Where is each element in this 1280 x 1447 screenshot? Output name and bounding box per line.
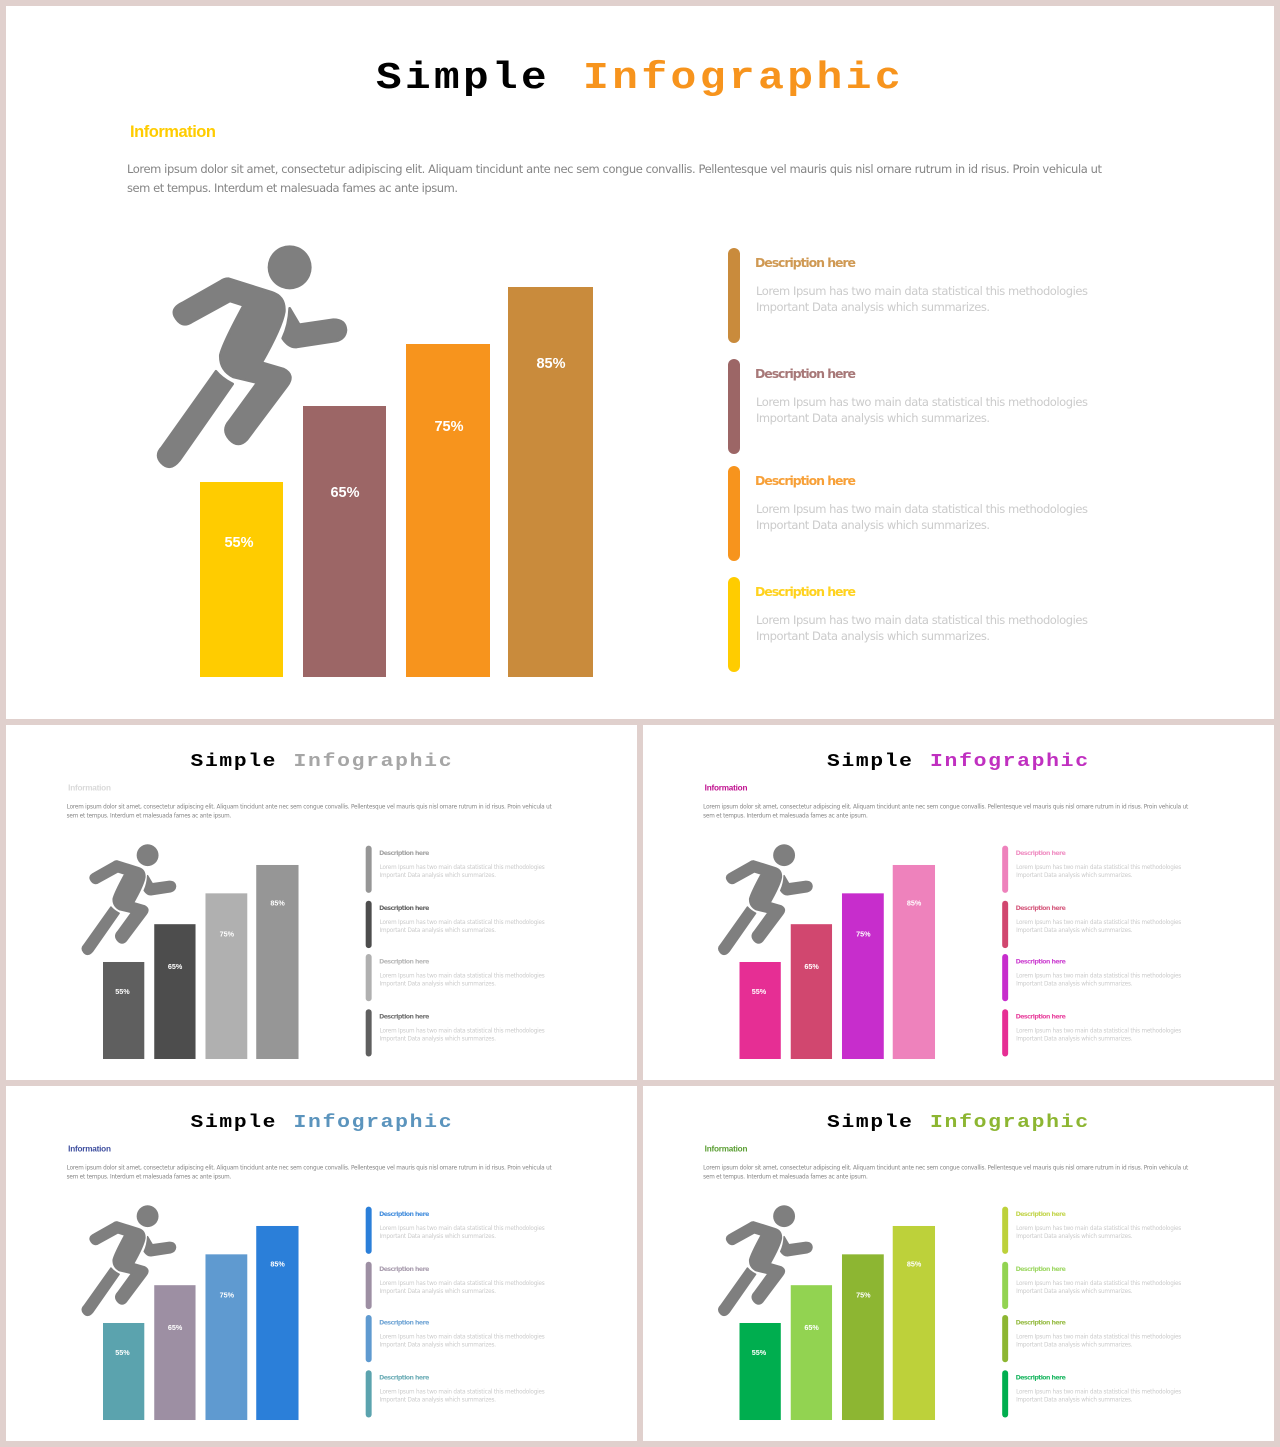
text block: intro: Lorem ipsum dolor sit amet, consectetur adipiscing elit. Aliquam tincidunt ante nec sem congue convallis. Pellentesque vel mauris quis nisl ornare rutrum in id risus. Proin vehicula ut [703,1165,1189,1171]
list: descriptions: Lorem Ipsum has two main data statistical this methodologies [756,502,1088,516]
title: Infographic [294,750,453,772]
list: descriptions: Important Data analysis which summarizes. [756,629,990,643]
list: descriptions: Description here [755,366,856,381]
list: descriptions: Lorem Ipsum has two main data statistical this methodologies [1016,1226,1181,1232]
text block: intro: Lorem ipsum dolor sit amet, consectetur adipiscing elit. Aliquam tincidunt ante nec sem congue convallis. Pellentesque vel mauris quis nisl ornare rutrum in id risus. Proin vehicula ut [67,1165,552,1171]
bar chart: 85% [907,1259,922,1268]
list: descriptions: Important Data analysis which summarizes. [756,518,990,532]
text block: intro [703,1165,1189,1181]
bar chart: 85% [270,898,285,907]
bar chart: 55% [115,1348,130,1357]
list: descriptions: Description here [379,1319,429,1326]
list: descriptions: Description here [379,905,429,912]
text block: intro [67,1165,552,1181]
bar chart [103,1226,299,1420]
title: Infographic [930,1111,1090,1133]
title [376,57,904,100]
list: descriptions: Description here [1016,1319,1066,1326]
title [191,750,453,772]
list: descriptions: Important Data analysis which summarizes. [1016,1234,1133,1240]
list: descriptions: Description here [1016,958,1066,965]
list: descriptions: Important Data analysis which summarizes. [1016,1342,1133,1348]
list: descriptions: Important Data analysis which summarizes. [1016,1037,1133,1043]
bar chart [740,1226,935,1420]
text block: intro: sem et tempus. Interdum et malesuada fames ac ante ipsum. [703,814,868,820]
panel: green slide [643,1086,1274,1441]
list: descriptions: Important Data analysis which summarizes. [756,411,990,425]
panel: pink slide [643,725,1274,1080]
list: descriptions: Important Data analysis which summarizes. [1016,981,1133,987]
bar chart [740,865,935,1059]
title: Infographic [583,57,904,100]
list: descriptions: Important Data analysis which summarizes. [380,873,496,879]
list: descriptions: Important Data analysis which summarizes. [380,1234,496,1240]
bar chart: 85% [907,898,922,907]
list: descriptions: Description here [379,1211,429,1218]
list: descriptions: Lorem Ipsum has two main data statistical this methodologies [380,1334,545,1340]
bar chart: 55% [752,987,767,996]
icon: running figure [719,844,812,954]
title: Simple [827,1111,914,1133]
text block: intro: sem et tempus. Interdum et malesuada fames ac ante ipsum. [67,814,232,820]
panel: blue slide [6,1086,637,1441]
text block: intro [703,804,1189,820]
list: descriptions: Lorem Ipsum has two main data statistical this methodologies [756,284,1088,298]
list: descriptions: Lorem Ipsum has two main data statistical this methodologies [380,1281,545,1287]
bar chart: 75% [434,419,464,435]
list: descriptions: Important Data analysis which summarizes. [380,1398,496,1404]
list: descriptions: Lorem Ipsum has two main data statistical this methodologies [1016,1334,1181,1340]
list: descriptions: Important Data analysis which summarizes. [380,981,496,987]
bar chart: 65% [804,1323,819,1332]
list: descriptions [1002,1207,1181,1418]
list: descriptions: Important Data analysis which summarizes. [1016,1398,1133,1404]
title: Infographic [294,1111,453,1133]
list: descriptions [1002,846,1181,1057]
list: descriptions [366,1207,545,1418]
icon: running figure [82,1205,176,1315]
list: descriptions: Description here [379,1375,429,1382]
text block: intro: sem et tempus. Interdum et malesuada fames ac ante ipsum. [67,1175,232,1181]
panel: orange main slide [6,6,1274,719]
list: descriptions: Description here [1016,905,1066,912]
bar chart: 65% [804,962,819,971]
heading: information: Information [130,123,216,141]
icon: running figure [719,1205,812,1315]
list: descriptions: Important Data analysis which summarizes. [1016,1289,1133,1295]
list: descriptions: Lorem Ipsum has two main data statistical this methodologies [380,920,545,926]
bar chart: 55% [752,1348,767,1357]
bar chart: 65% [168,1323,183,1332]
list: descriptions: Lorem Ipsum has two main data statistical this methodologies [380,1029,545,1035]
bar chart: 55% [115,987,130,996]
bar chart: 75% [856,930,871,939]
title: Simple [191,1111,277,1133]
title [191,1111,453,1133]
title: Simple [376,57,550,100]
panel: gray slide [6,725,637,1080]
text block: intro: sem et tempus. Interdum et malesuada fames ac ante ipsum. [127,181,458,195]
text block: intro: Lorem ipsum dolor sit amet, consectetur adipiscing elit. Aliquam tincidunt ante nec sem congue convallis. Pellentesque vel mauris quis nisl ornare rutrum in id risus. Proin vehicula ut [703,804,1189,810]
bar chart: 85% [536,356,566,372]
text block: intro [67,804,552,820]
text block: intro [127,162,1102,195]
list: descriptions: Description here [379,850,429,857]
title: Simple [191,750,277,772]
bar chart [103,865,299,1059]
list: descriptions: Description here [379,958,429,965]
list: descriptions: Important Data analysis which summarizes. [380,1289,496,1295]
list: descriptions: Description here [1016,1375,1066,1382]
list: descriptions: Lorem Ipsum has two main data statistical this methodologies [1016,865,1181,871]
list: descriptions: Important Data analysis which summarizes. [380,1037,496,1043]
list: descriptions: Description here [1016,1211,1066,1218]
bar chart [200,287,593,677]
bar chart: 75% [856,1291,871,1300]
list: descriptions: Important Data analysis which summarizes. [380,1342,496,1348]
list: descriptions: Lorem Ipsum has two main data statistical this methodologies [1016,1390,1181,1396]
list: descriptions [728,248,1088,672]
icon: running figure [158,245,346,467]
heading: information: Information [705,783,747,792]
list: descriptions: Description here [1016,850,1066,857]
list: descriptions: Lorem Ipsum has two main data statistical this methodologies [380,1390,545,1396]
list: descriptions: Description here [1016,1266,1066,1273]
heading: information: Information [68,1144,111,1153]
title: Simple [827,750,914,772]
list: descriptions: Lorem Ipsum has two main data statistical this methodologies [756,395,1088,409]
list: descriptions: Lorem Ipsum has two main data statistical this methodologies [756,613,1088,627]
list: descriptions: Lorem Ipsum has two main data statistical this methodologies [1016,920,1181,926]
bar chart: 55% [224,535,254,551]
text block: intro: Lorem ipsum dolor sit amet, consectetur adipiscing elit. Aliquam tincidunt ante nec sem congue convallis. Pellentesque vel mauris quis nisl ornare rutrum in id risus. Proin vehicula ut [67,804,552,810]
text block: intro: sem et tempus. Interdum et malesuada fames ac ante ipsum. [703,1175,868,1181]
title [827,750,1090,772]
text block: intro: Lorem ipsum dolor sit amet, consectetur adipiscing elit. Aliquam tincidunt ante nec sem congue convallis. Pellentesque vel mauris quis nisl ornare rutrum in id risus. Proin vehicula ut [127,162,1102,176]
list: descriptions: Important Data analysis which summarizes. [380,928,496,934]
list: descriptions: Description here [379,1266,429,1273]
list: descriptions: Lorem Ipsum has two main data statistical this methodologies [1016,1281,1181,1287]
list: descriptions: Description here [379,1014,429,1021]
icon: running figure [82,844,176,954]
heading: information: Information [705,1144,747,1153]
list: descriptions: Lorem Ipsum has two main data statistical this methodologies [1016,1029,1181,1035]
title [827,1111,1090,1133]
bar chart: 65% [330,485,360,501]
list: descriptions: Important Data analysis which summarizes. [1016,873,1133,879]
list: descriptions: Lorem Ipsum has two main data statistical this methodologies [380,865,545,871]
bar chart: 65% [168,962,183,971]
bar chart: 85% [270,1259,285,1268]
list: descriptions: Lorem Ipsum has two main data statistical this methodologies [380,1226,545,1232]
bar chart: 75% [220,930,235,939]
title: Infographic [930,750,1090,772]
list: descriptions: Description here [755,584,856,599]
list: descriptions: Description here [1016,1014,1066,1021]
list: descriptions: Description here [755,473,856,488]
list: descriptions: Description here [755,255,856,270]
list: descriptions [366,846,545,1057]
heading: information: Information [68,783,111,792]
list: descriptions: Important Data analysis which summarizes. [756,300,990,314]
list: descriptions: Lorem Ipsum has two main data statistical this methodologies [1016,973,1181,979]
list: descriptions: Important Data analysis which summarizes. [1016,928,1133,934]
list: descriptions: Lorem Ipsum has two main data statistical this methodologies [380,973,545,979]
bar chart: 75% [220,1291,235,1300]
